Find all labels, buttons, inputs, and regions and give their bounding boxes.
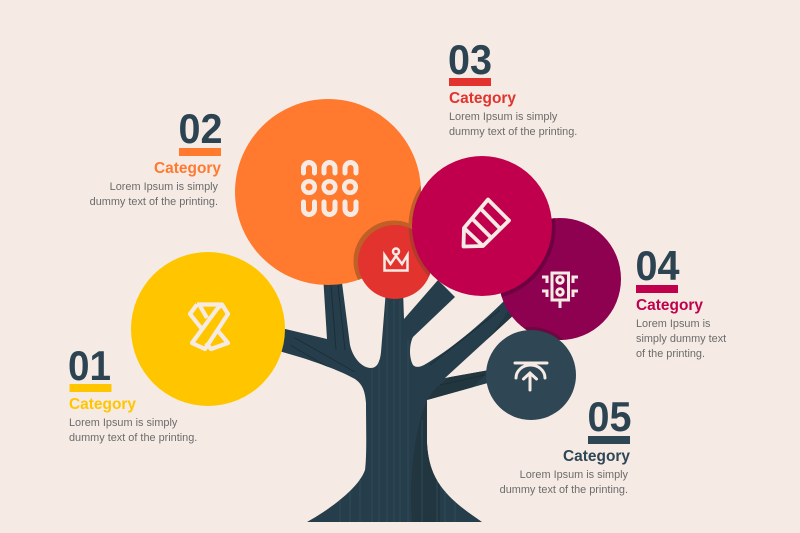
label 01: dummy text of the printing. xyxy=(69,432,197,444)
label 05: Lorem Ipsum is simply xyxy=(520,469,629,481)
label 04: of the printing. xyxy=(636,348,705,360)
label 04 xyxy=(636,242,726,360)
label 02 xyxy=(90,105,222,208)
label 02: 02 xyxy=(178,105,222,152)
label 03: dummy text of the printing. xyxy=(449,126,577,138)
label 01: Category xyxy=(69,396,136,413)
icon: grid of arches and rings xyxy=(303,162,356,214)
icon: pencil xyxy=(464,200,509,246)
label 02: dummy text of the printing. xyxy=(90,196,218,208)
icon: crown xyxy=(384,248,408,270)
circle: yellow xyxy=(131,252,285,406)
label 04: 04 xyxy=(636,242,680,289)
label 04: Category xyxy=(636,297,703,314)
circle: orange xyxy=(235,99,421,285)
circle: red xyxy=(354,220,434,302)
label 05 xyxy=(500,393,632,496)
label 01: 01 xyxy=(68,342,111,389)
label 02: Category xyxy=(154,160,221,177)
circle: crimson xyxy=(408,153,556,300)
label 05: dummy text of the printing. xyxy=(500,484,628,496)
tree trunk xyxy=(282,280,512,522)
label 04: simply dummy text xyxy=(636,333,726,345)
label 02: Lorem Ipsum is simply xyxy=(110,181,219,193)
label 03: 03 xyxy=(448,36,492,83)
circle: purple xyxy=(499,218,621,340)
label 01 xyxy=(68,342,197,444)
label 03 xyxy=(448,36,577,138)
label 04: Lorem Ipsum is xyxy=(636,318,711,330)
label 03: Category xyxy=(449,90,516,107)
icon: upload arch xyxy=(515,363,547,390)
circle: teal xyxy=(484,327,578,421)
label 01: Lorem Ipsum is simply xyxy=(69,417,178,429)
label 05: Category xyxy=(563,448,630,465)
label 05: 05 xyxy=(588,393,632,440)
icon: traffic light xyxy=(542,273,578,308)
icon: ribbon xyxy=(190,304,228,349)
label 03: Lorem Ipsum is simply xyxy=(449,111,558,123)
